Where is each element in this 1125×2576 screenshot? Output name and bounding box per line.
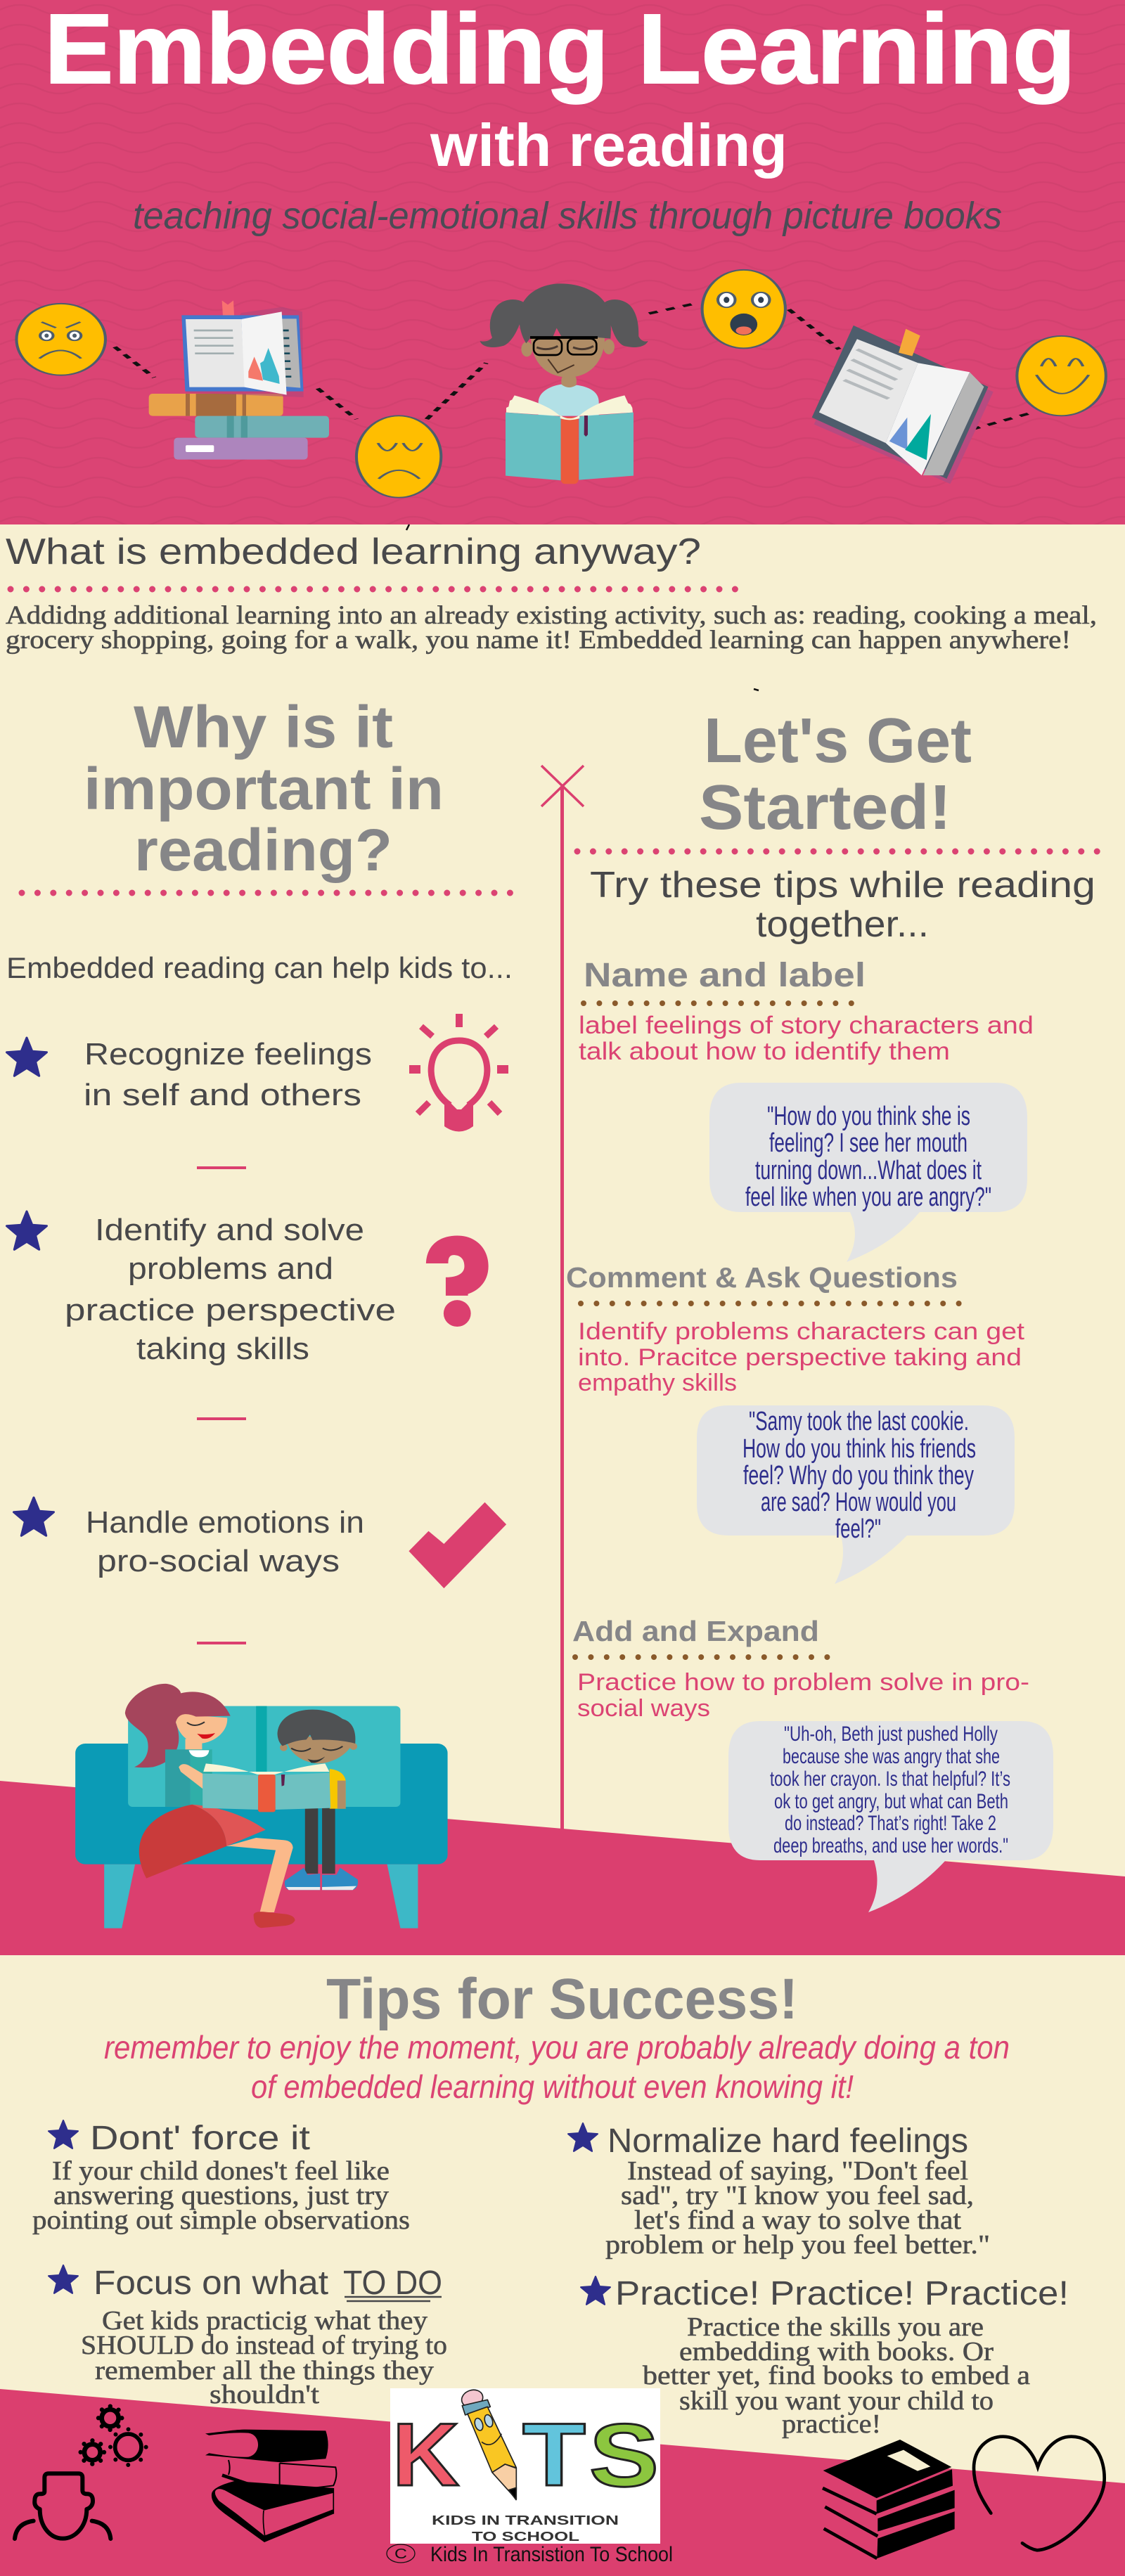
illustration: mother and child reading on sofa <box>75 1684 448 1928</box>
body <box>605 2156 990 2260</box>
speech bubble: ok to get angry, but what can Beth <box>774 1790 1008 1813</box>
body: SHOULD do instead of trying to <box>81 2331 447 2360</box>
body: Practice the skills you are <box>687 2312 984 2342</box>
text: recognize feelings: in self and others <box>84 1078 361 1112</box>
heading: Comment & Ask Questions <box>566 1261 958 1294</box>
panel: tip practice <box>581 2275 1069 2439</box>
panel: pink header background <box>0 0 1125 524</box>
text: handle emotions: pro-social ways <box>97 1544 340 1578</box>
description: Practice how to problem solve in pro- <box>577 1669 1029 1696</box>
vertical divider with cross mark <box>541 766 584 1829</box>
text block: try these tips: together... <box>756 904 929 945</box>
text: handle emotions: Handle emotions in <box>86 1505 364 1540</box>
text: identify and solve: Identify and solve <box>95 1213 364 1247</box>
icon: star <box>6 1038 46 1076</box>
logo: kids in transition to school <box>390 2388 660 2544</box>
logo wordmark: TO SCHOOL <box>472 2530 579 2544</box>
divider <box>197 1642 246 1644</box>
logo wordmark: KIDS IN TRANSITION <box>432 2513 619 2527</box>
heading: Focus on what <box>94 2265 328 2302</box>
text: identify and solve <box>65 1213 396 1366</box>
panel: comment and ask questions <box>566 1261 1025 1584</box>
divider <box>197 1417 246 1420</box>
text: identify and solve: practice perspective <box>65 1293 396 1327</box>
heading: Normalize hard feelings <box>608 2123 968 2160</box>
body: shouldn't <box>210 2380 320 2409</box>
heading: Practice! Practice! Practice! <box>615 2275 1069 2312</box>
speech bubble: feel like when you are angry?" <box>745 1183 991 1212</box>
description <box>578 1318 1025 1396</box>
dotted rule <box>11 586 739 592</box>
logo letter S: S <box>589 2405 659 2505</box>
body <box>32 2156 410 2235</box>
text: identify and solve: problems and <box>128 1251 333 1286</box>
icon: star <box>13 1498 53 1535</box>
logo letter K: K <box>392 2404 459 2504</box>
heading <box>94 2265 442 2302</box>
speech bubble: feeling? I see her mouth <box>769 1128 968 1158</box>
logo wordmark <box>432 2513 619 2544</box>
body: embedding with books. Or <box>679 2337 994 2366</box>
speech bubble: because she was angry that she <box>783 1745 1000 1768</box>
icon: surprised face <box>702 270 785 348</box>
header faces and connectors <box>16 270 1106 498</box>
speck marks <box>406 524 759 690</box>
description: into. Pracitce perspective taking and <box>578 1344 1022 1371</box>
icon: girl reading <box>480 283 648 484</box>
panel: name and label <box>579 957 1034 1262</box>
text block: try these tips: Try these tips while reading <box>590 865 1095 906</box>
speech bubble: "Samy took the last cookie. <box>749 1407 969 1436</box>
body: answering questions, just try <box>53 2181 389 2210</box>
text block: embedded reading intro: Embedded reading can help kids to... <box>6 951 513 984</box>
description <box>577 1669 1029 1722</box>
speech bubble <box>709 1083 1027 1262</box>
panel: benefit 1 <box>6 1014 508 1169</box>
speech bubble: turning down...What does it <box>755 1156 982 1185</box>
body: Get kids practicig what they <box>102 2306 428 2336</box>
panel: tip focus on what to do <box>49 2265 447 2409</box>
body <box>643 2312 1030 2439</box>
icon: happy face <box>1017 336 1106 416</box>
icon: star <box>49 2120 78 2149</box>
dotted rule <box>581 1301 959 1306</box>
text: identify and solve: taking skills <box>136 1332 309 1366</box>
panel: benefit 3 <box>13 1498 506 1644</box>
body: practice! <box>782 2409 881 2439</box>
icon: tilted open book <box>812 326 994 484</box>
panel: add and expand <box>572 1615 1053 1912</box>
logo letter T: T <box>522 2404 586 2504</box>
heading: with reading: with reading <box>430 112 788 179</box>
divider <box>197 1166 246 1169</box>
speech bubble: deep breaths, and use her words." <box>773 1834 1008 1857</box>
speech bubble: do instead? That’s right! Take 2 <box>785 1812 996 1835</box>
body <box>81 2306 447 2409</box>
icon: sad face <box>356 416 441 498</box>
text block: try these tips <box>590 865 1095 945</box>
heading: why is it important: Why is it <box>134 694 393 760</box>
icon: star <box>581 2276 610 2305</box>
panel: tip don't force it <box>32 2120 410 2235</box>
panel: benefit 2 <box>6 1211 489 1420</box>
body: remember all the things they <box>95 2356 434 2385</box>
icon: book stack and open book <box>149 300 329 460</box>
text: handle emotions <box>86 1505 364 1578</box>
description: Identify problems characters can get <box>578 1318 1025 1345</box>
icon: heart outline <box>974 2437 1105 2550</box>
body: If your child dones't feel like <box>52 2156 390 2186</box>
speech bubble: "How do you think she is <box>767 1102 970 1131</box>
heading: let's get started: Started! <box>699 773 951 843</box>
speech bubble: feel? Why do you think they <box>743 1461 974 1490</box>
dotted rule <box>584 1000 867 1006</box>
dotted rule <box>22 890 510 896</box>
text block: definition: grocery shopping, going for a walk, you name it! Embedded learning can happen anywhere! <box>6 626 1071 655</box>
body: problem or help you feel better." <box>605 2230 990 2260</box>
subtitle: teaching social-emotional skills through picture books <box>133 195 1002 237</box>
icon: closed book stack <box>823 2440 955 2558</box>
icon: stack of books <box>205 2430 336 2542</box>
text: recognize feelings: Recognize feelings <box>84 1037 372 1071</box>
text block: definition: Addidng additional learning into an already existing activity, such as: reading, cooking a meal, <box>6 601 1097 630</box>
logo pencil <box>459 2388 516 2500</box>
speech bubble <box>697 1405 1015 1584</box>
copyright line: Kids In Transistion To School <box>430 2543 673 2566</box>
body: Instead of saying, "Don't feel <box>627 2156 968 2186</box>
heading: Name and label <box>584 957 866 994</box>
heading: Dont' force it <box>90 2120 310 2157</box>
icon: head with gears <box>15 2407 146 2539</box>
dotted rule <box>577 848 1098 855</box>
icon: angry face <box>16 304 105 375</box>
heading: why is it important: important in <box>84 756 444 822</box>
body: better yet, find books to embed a <box>643 2361 1030 2390</box>
icon: check mark <box>409 1502 506 1588</box>
heading: Add and Expand <box>572 1615 819 1647</box>
panel: tip normalize hard feelings <box>568 2123 990 2260</box>
speech bubble: are sad? How would you <box>761 1488 956 1517</box>
heading: let's get started <box>699 706 972 843</box>
description: empathy skills <box>578 1370 737 1396</box>
dotted rule <box>575 1654 828 1660</box>
body: pointing out simple observations <box>32 2205 410 2235</box>
speech bubble: feel?" <box>835 1514 881 1544</box>
text: recognize feelings <box>84 1037 372 1112</box>
text block: remember to enjoy: of embedded learning without even knowing it! <box>251 2068 854 2105</box>
icon: star <box>49 2265 78 2293</box>
icon: light bulb <box>409 1014 508 1132</box>
heading: why is it important <box>84 694 444 883</box>
description: label feelings of story characters and <box>579 1012 1034 1039</box>
description <box>579 1012 1034 1065</box>
dashed connectors <box>115 302 1031 430</box>
copyright line: C <box>394 2546 407 2562</box>
icon: question mark <box>426 1236 489 1327</box>
body: sad", try "I know you feel sad, <box>621 2181 974 2210</box>
panel: pink footer band <box>0 2389 1125 2576</box>
description: talk about how to identify them <box>579 1038 950 1065</box>
heading: tips for success: Tips for Success! <box>326 1967 798 2031</box>
panel: pink floor band <box>0 1781 1125 1955</box>
heading: what is embedded learning: What is embedded learning anyway? <box>6 532 701 572</box>
icon: star <box>568 2123 598 2151</box>
speech bubble: How do you think his friends <box>742 1434 976 1464</box>
body: skill you want your child to <box>679 2386 994 2416</box>
heading: let's get started: Let's Get <box>704 706 972 776</box>
heading: why is it important: reading? <box>134 817 392 883</box>
text block: remember to enjoy <box>104 2029 1010 2105</box>
speech bubble: took her crayon. Is that helpful? It’s <box>770 1767 1010 1791</box>
heading: TO DO <box>343 2265 442 2302</box>
body: let's find a way to solve that <box>634 2205 961 2235</box>
speech bubble <box>728 1721 1053 1912</box>
text block: remember to enjoy: remember to enjoy the moment, you are probably already doing a ton <box>104 2029 1010 2066</box>
description: social ways <box>577 1695 710 1722</box>
icon: star <box>6 1211 46 1249</box>
speech bubble: "Uh-oh, Beth just pushed Holly <box>784 1722 998 1746</box>
text block: definition <box>6 601 1097 655</box>
